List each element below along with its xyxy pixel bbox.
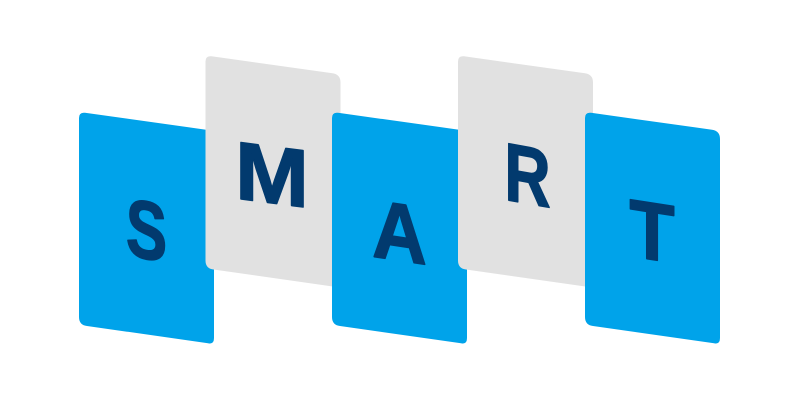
letter S: S xyxy=(126,182,167,280)
panel: A card xyxy=(332,113,467,344)
letter T: T xyxy=(629,182,675,281)
panel: S card xyxy=(79,113,214,344)
letter R: R xyxy=(504,125,551,225)
letter M: M xyxy=(235,125,309,226)
panel: R card xyxy=(458,56,593,287)
panel: T card xyxy=(585,113,720,344)
letter A: A xyxy=(372,182,427,282)
panel: M card xyxy=(206,56,340,287)
